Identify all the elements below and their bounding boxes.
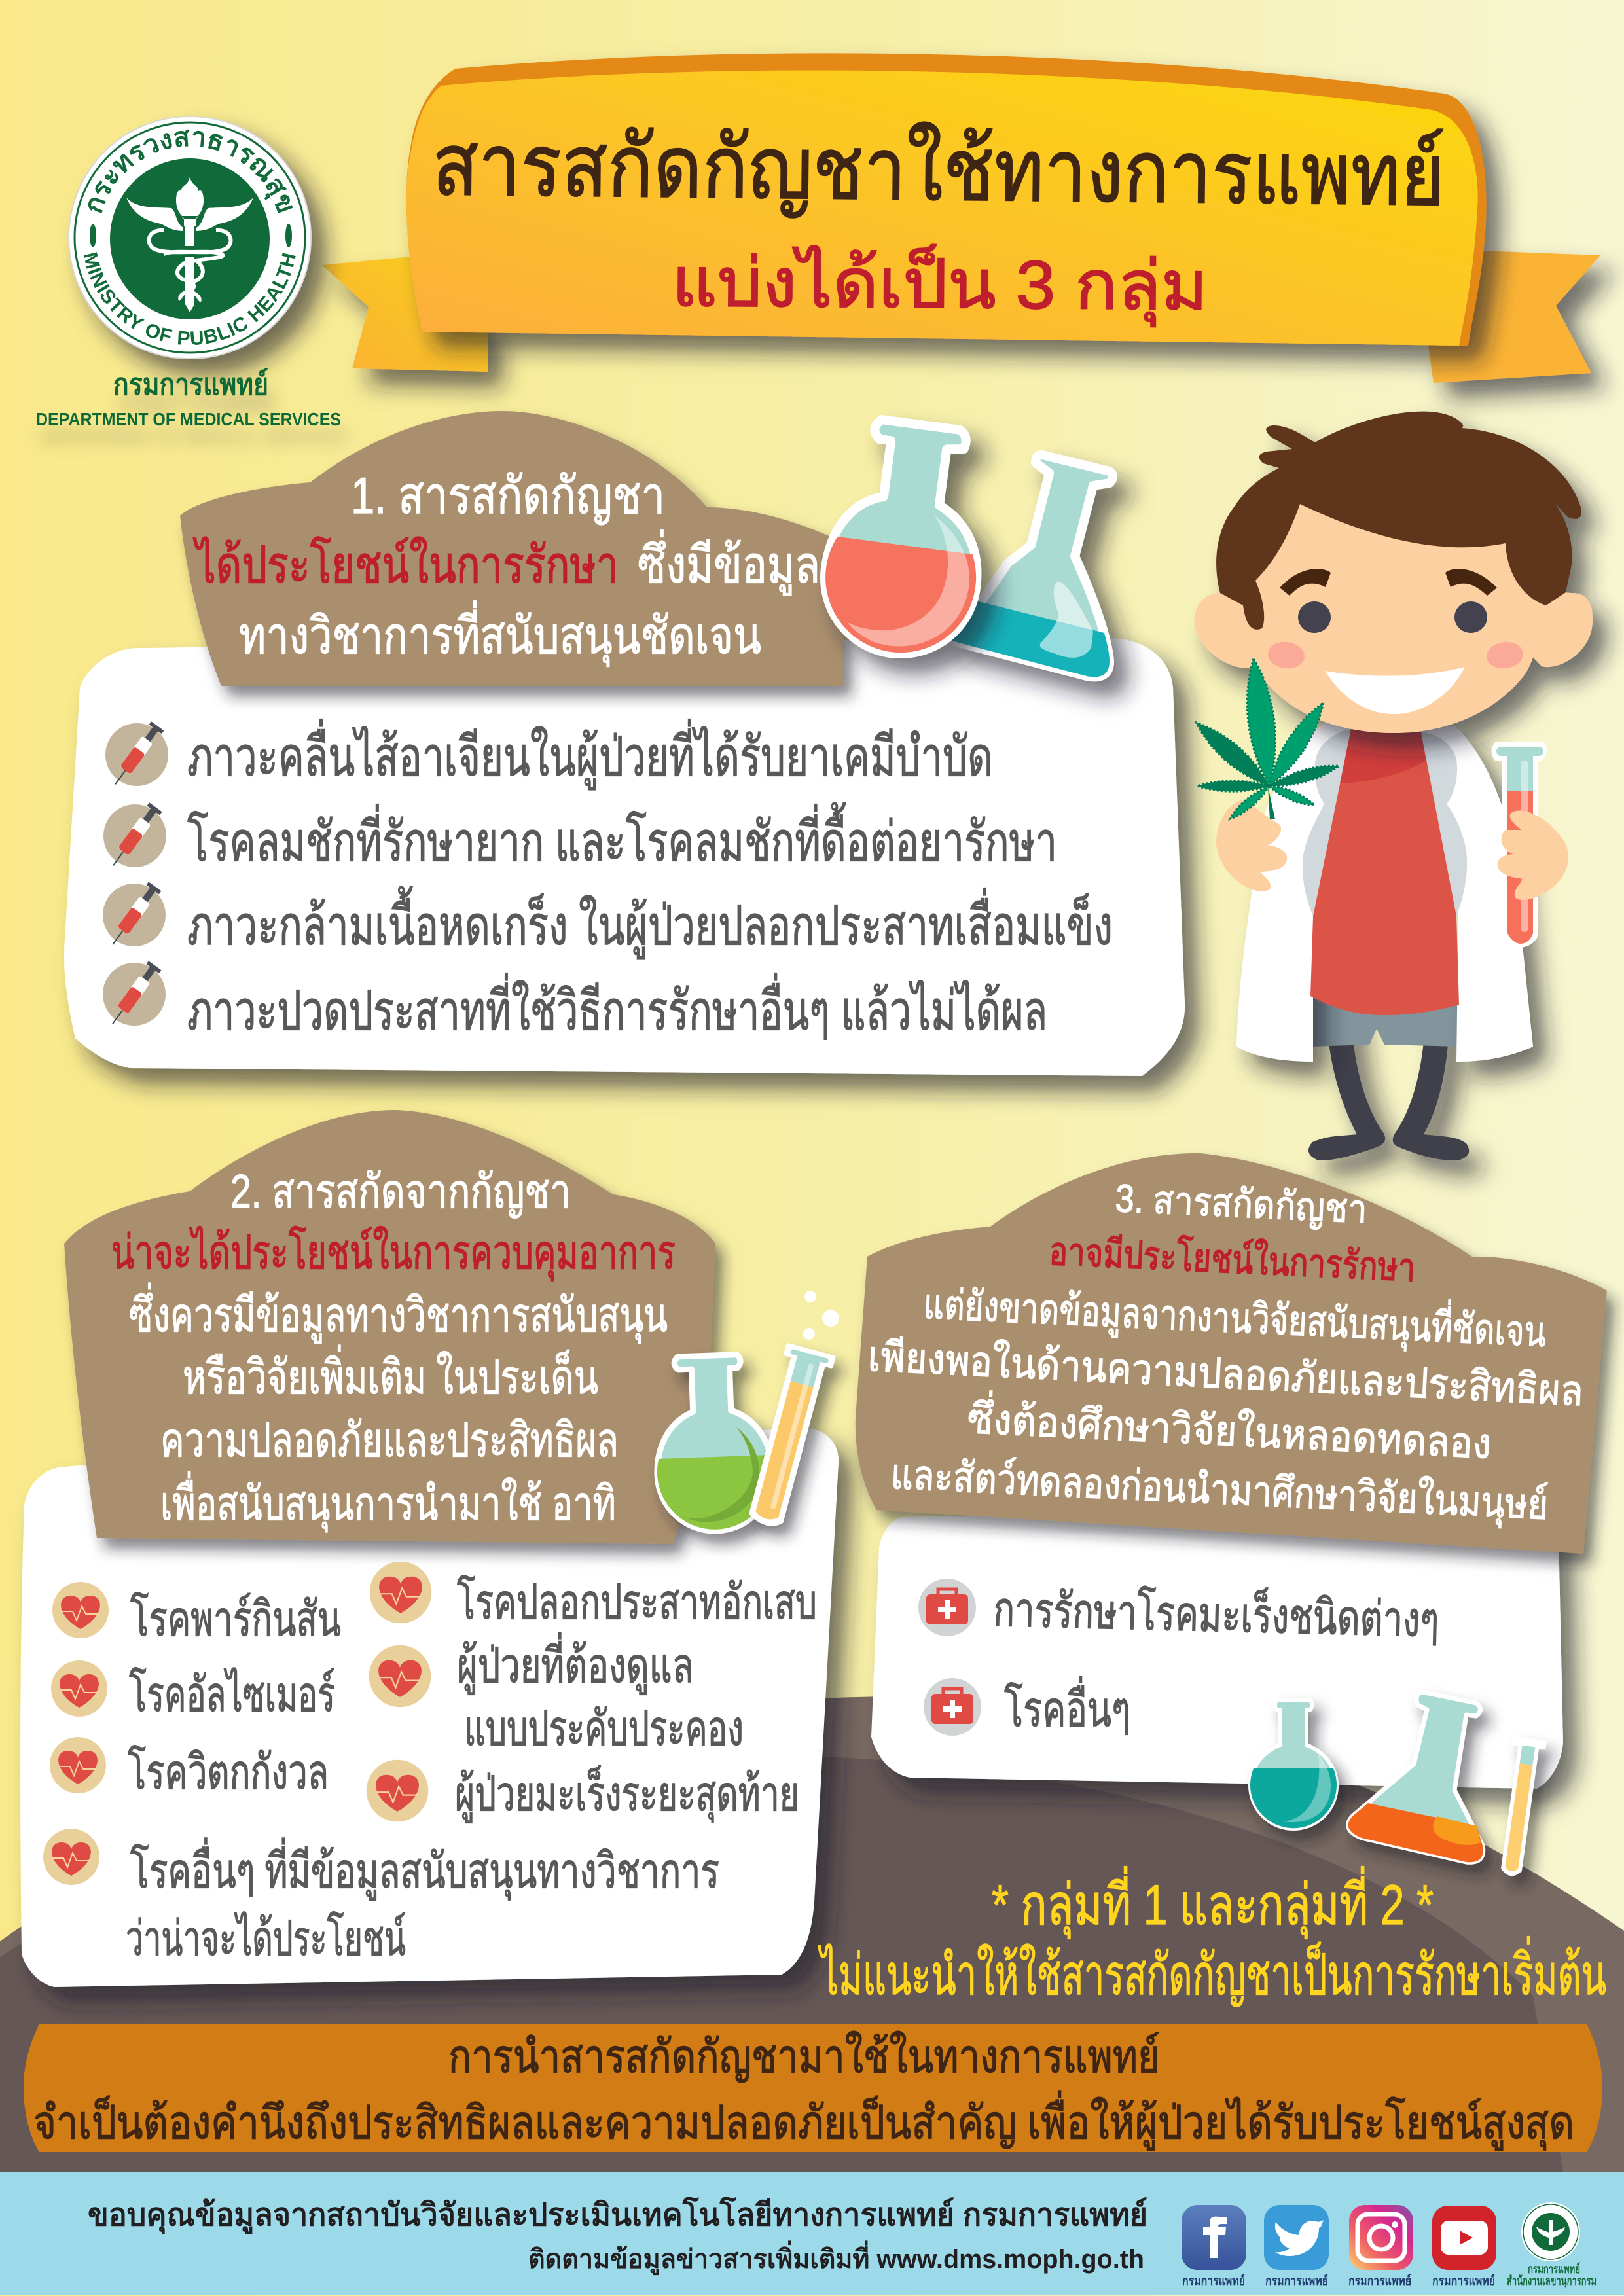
tan heading 3 bbox=[856, 1153, 1607, 1554]
item text: others: ว่าน่าจะได้ประโยชน์ bbox=[126, 1911, 406, 1965]
social labels: กรมการแพทย์ bbox=[1182, 2274, 1245, 2288]
icon: facebook bbox=[1182, 2205, 1246, 2270]
emblem: winged caduceus bbox=[126, 177, 253, 312]
item text: palliative: แบบประคับประคอง bbox=[464, 1701, 744, 1755]
white card 3 bbox=[871, 1505, 1563, 1789]
eyes bbox=[1298, 601, 1331, 633]
orange conclusion bar: การนำสารสกัดกัญชามาใช้ในทางการแพทย์ bbox=[448, 2030, 1160, 2083]
shorts bbox=[1310, 982, 1459, 1047]
tan heading 1 bbox=[180, 411, 844, 686]
tan heading 2: ความปลอดภัยและประสิทธิผล bbox=[160, 1414, 619, 1467]
heart icon 6 bbox=[367, 1760, 428, 1821]
smile bbox=[1325, 667, 1465, 714]
tan heading 2: น่าจะได้ประโยชน์ในการควบคุมอาการ bbox=[111, 1225, 676, 1281]
icon: teal round flask bbox=[1250, 1700, 1337, 1829]
brown hill background bbox=[0, 1696, 1624, 2179]
white card 2 bbox=[20, 1428, 839, 1987]
icon: twitter bbox=[1264, 2205, 1329, 2270]
list text 2: โรคลมชักที่รักษายาก และโรคลมชักที่ดื้อต่อยารักษา bbox=[187, 802, 1057, 872]
left ribbon tail bbox=[322, 257, 488, 372]
list text 3: ภาวะกล้ามเนื้อหดเกร็ง ในผู้ป่วยปลอกประสาทเสื่อมแข็ง bbox=[187, 886, 1113, 959]
item text: others: โรคอื่นๆ ที่มีข้อมูลสนับสนุนทางวิชาการ bbox=[130, 1837, 719, 1901]
icon: first-aid kit 2 bbox=[924, 1678, 981, 1736]
face bbox=[1242, 494, 1545, 733]
footer band bbox=[0, 2172, 1624, 2295]
subtitle: แบ่งได้เป็น 3 กลุ่ม bbox=[672, 242, 1208, 328]
head bbox=[1195, 412, 1593, 733]
icon: instagram bbox=[1349, 2205, 1413, 2270]
heart icon 2 bbox=[51, 1660, 107, 1717]
icon: first-aid kit 1 bbox=[918, 1579, 976, 1636]
lab coat bbox=[1236, 723, 1533, 1062]
panel 3 bbox=[856, 1153, 1607, 1876]
acknowledgement: ขอบคุณข้อมูลจากสถาบันวิจัยและประเมินเทคโนโลยีทางการแพทย์ กรมการแพทย์ bbox=[88, 2196, 1147, 2234]
heart icon 5 bbox=[369, 1645, 431, 1707]
item text: cancers: การรักษาโรคมะเร็งชนิดต่างๆ bbox=[993, 1581, 1439, 1647]
coat inner lining bbox=[1303, 729, 1351, 916]
item text: MS: โรคปลอกประสาทอักเสบ bbox=[457, 1575, 817, 1629]
tan heading 1: ซึ่งมีข้อมูล bbox=[638, 530, 820, 596]
website: ติดตามข้อมูลข่าวสารเพิ่มเติมที่ www.dms.moph.go.th bbox=[528, 2240, 1144, 2275]
tan heading 3: 3. สารสกัดกัญชา bbox=[1114, 1176, 1368, 1232]
department name bbox=[36, 367, 341, 429]
tan heading 3: อาจมีประโยชน์ในการรักษา bbox=[1048, 1229, 1416, 1289]
tan heading 2 bbox=[64, 1110, 715, 1544]
red shirt bbox=[1310, 729, 1459, 1015]
eyebrows bbox=[1280, 569, 1331, 596]
list row: syringe icon 4 bbox=[103, 961, 166, 1028]
tan heading 2: ซึ่งควรมีข้อมูลทางวิชาการสนับสนุน bbox=[129, 1283, 668, 1344]
icon: yellow tube bbox=[1495, 1738, 1545, 1876]
bubbles bbox=[803, 1291, 839, 1340]
tan heading 2: 2. สารสกัดจากกัญชา bbox=[230, 1166, 571, 1218]
item text: others bbox=[126, 1837, 719, 1965]
small ministry logo bbox=[1521, 2202, 1580, 2261]
yellow note: * กลุ่มที่ 1 และกลุ่มที่ 2 * bbox=[992, 1866, 1434, 1939]
bubbles bbox=[1522, 1695, 1549, 1727]
icon: yellow test tube bbox=[742, 1345, 833, 1529]
heart icon 3 bbox=[50, 1737, 106, 1793]
item text: palliative: ผู้ป่วยที่ต้องดูแล bbox=[457, 1632, 694, 1695]
department name: กรมการแพทย์ bbox=[113, 367, 268, 401]
hair bbox=[1216, 412, 1581, 630]
panel 1 bbox=[64, 411, 1185, 1076]
cannabis leaf bbox=[1190, 656, 1341, 822]
list row: syringe icon 1 bbox=[105, 721, 168, 789]
test tube bbox=[1491, 742, 1547, 948]
character: doctor holding cannabis leaf and test tube bbox=[1190, 412, 1593, 1160]
item text: others: โรคอื่นๆ bbox=[1004, 1676, 1130, 1736]
tan heading 1: ได้ประโยชน์ในการรักษา bbox=[192, 536, 619, 594]
banner body bbox=[406, 53, 1487, 346]
department name: DEPARTMENT OF MEDICAL SERVICES bbox=[36, 409, 341, 429]
tan heading 2: หรือวิจัยเพิ่มเติม ในประเด็น bbox=[183, 1345, 598, 1404]
department label bbox=[1507, 2262, 1597, 2289]
panel 2 bbox=[20, 1110, 839, 1987]
heart icon 1 bbox=[52, 1582, 109, 1638]
icon: green round flask bbox=[653, 1354, 774, 1533]
hand right bbox=[1498, 811, 1568, 900]
heart icon 7 bbox=[43, 1829, 99, 1885]
social labels: กรมการแพทย์ bbox=[1348, 2274, 1411, 2288]
cheeks bbox=[1266, 639, 1307, 671]
tan heading 1: ทางวิชาการที่สนับสนุนชัดเจน bbox=[239, 601, 761, 667]
item text: anxiety: โรควิตกกังวล bbox=[128, 1745, 329, 1799]
list text 1: ภาวะคลื่นไส้อาเจียนในผู้ป่วยที่ได้รับยาเคมีบำบัด bbox=[187, 719, 993, 790]
department label: กรมการแพทย์ bbox=[1528, 2262, 1580, 2276]
item text: Parkinson: โรคพาร์กินสัน bbox=[130, 1592, 341, 1646]
orange conclusion bar bbox=[24, 2024, 1602, 2152]
item text: Alzheimer: โรคอัลไซเมอร์ bbox=[129, 1667, 335, 1721]
logo: ministry of public health bbox=[65, 115, 338, 385]
list row: syringe icon 2 bbox=[103, 802, 166, 870]
list row: syringe icon 3 bbox=[103, 882, 166, 949]
tan heading 3: ซึ่งต้องศึกษาวิจัยในหลอดทดลอง bbox=[966, 1390, 1492, 1467]
ears bbox=[1195, 589, 1263, 668]
title: สารสกัดกัญชาใช้ทางการแพทย์ bbox=[432, 117, 1445, 225]
right ribbon tail bbox=[1428, 251, 1600, 383]
heart icon 4 bbox=[370, 1562, 431, 1623]
icon: round flask bbox=[816, 415, 996, 663]
icon: youtube bbox=[1432, 2206, 1496, 2270]
legs and shoes bbox=[1308, 1001, 1469, 1160]
social labels bbox=[1182, 2274, 1495, 2288]
social labels: กรมการแพทย์ bbox=[1432, 2274, 1495, 2288]
yellow note bbox=[818, 1866, 1606, 2007]
tan heading 2: เพื่อสนับสนุนการนำมาใช้ อาทิ bbox=[160, 1471, 616, 1532]
item text: terminal cancer: ผู้ป่วยมะเร็งระยะสุดท้าย bbox=[455, 1766, 799, 1823]
list text 4: ภาวะปวดประสาทที่ใช้วิธีการรักษาอื่นๆ แล้วไม่ได้ผล bbox=[187, 973, 1047, 1041]
white card 1 bbox=[64, 638, 1185, 1076]
hand left bbox=[1216, 800, 1287, 891]
icon: conical flask bbox=[943, 455, 1113, 677]
logo text bottom: MINISTRY OF PUBLIC HEALTH bbox=[84, 252, 296, 345]
icon: orange conical flask bbox=[1348, 1692, 1483, 1862]
item text: palliative bbox=[457, 1632, 744, 1755]
logo side ornaments bbox=[90, 224, 292, 247]
ribbon banner bbox=[322, 53, 1600, 383]
tan heading 1: 1. สารสกัดกัญชา bbox=[351, 467, 665, 525]
logo text top: กระทรวงสาธารณสุข bbox=[88, 130, 293, 213]
social labels: กรมการแพทย์ bbox=[1265, 2274, 1328, 2288]
